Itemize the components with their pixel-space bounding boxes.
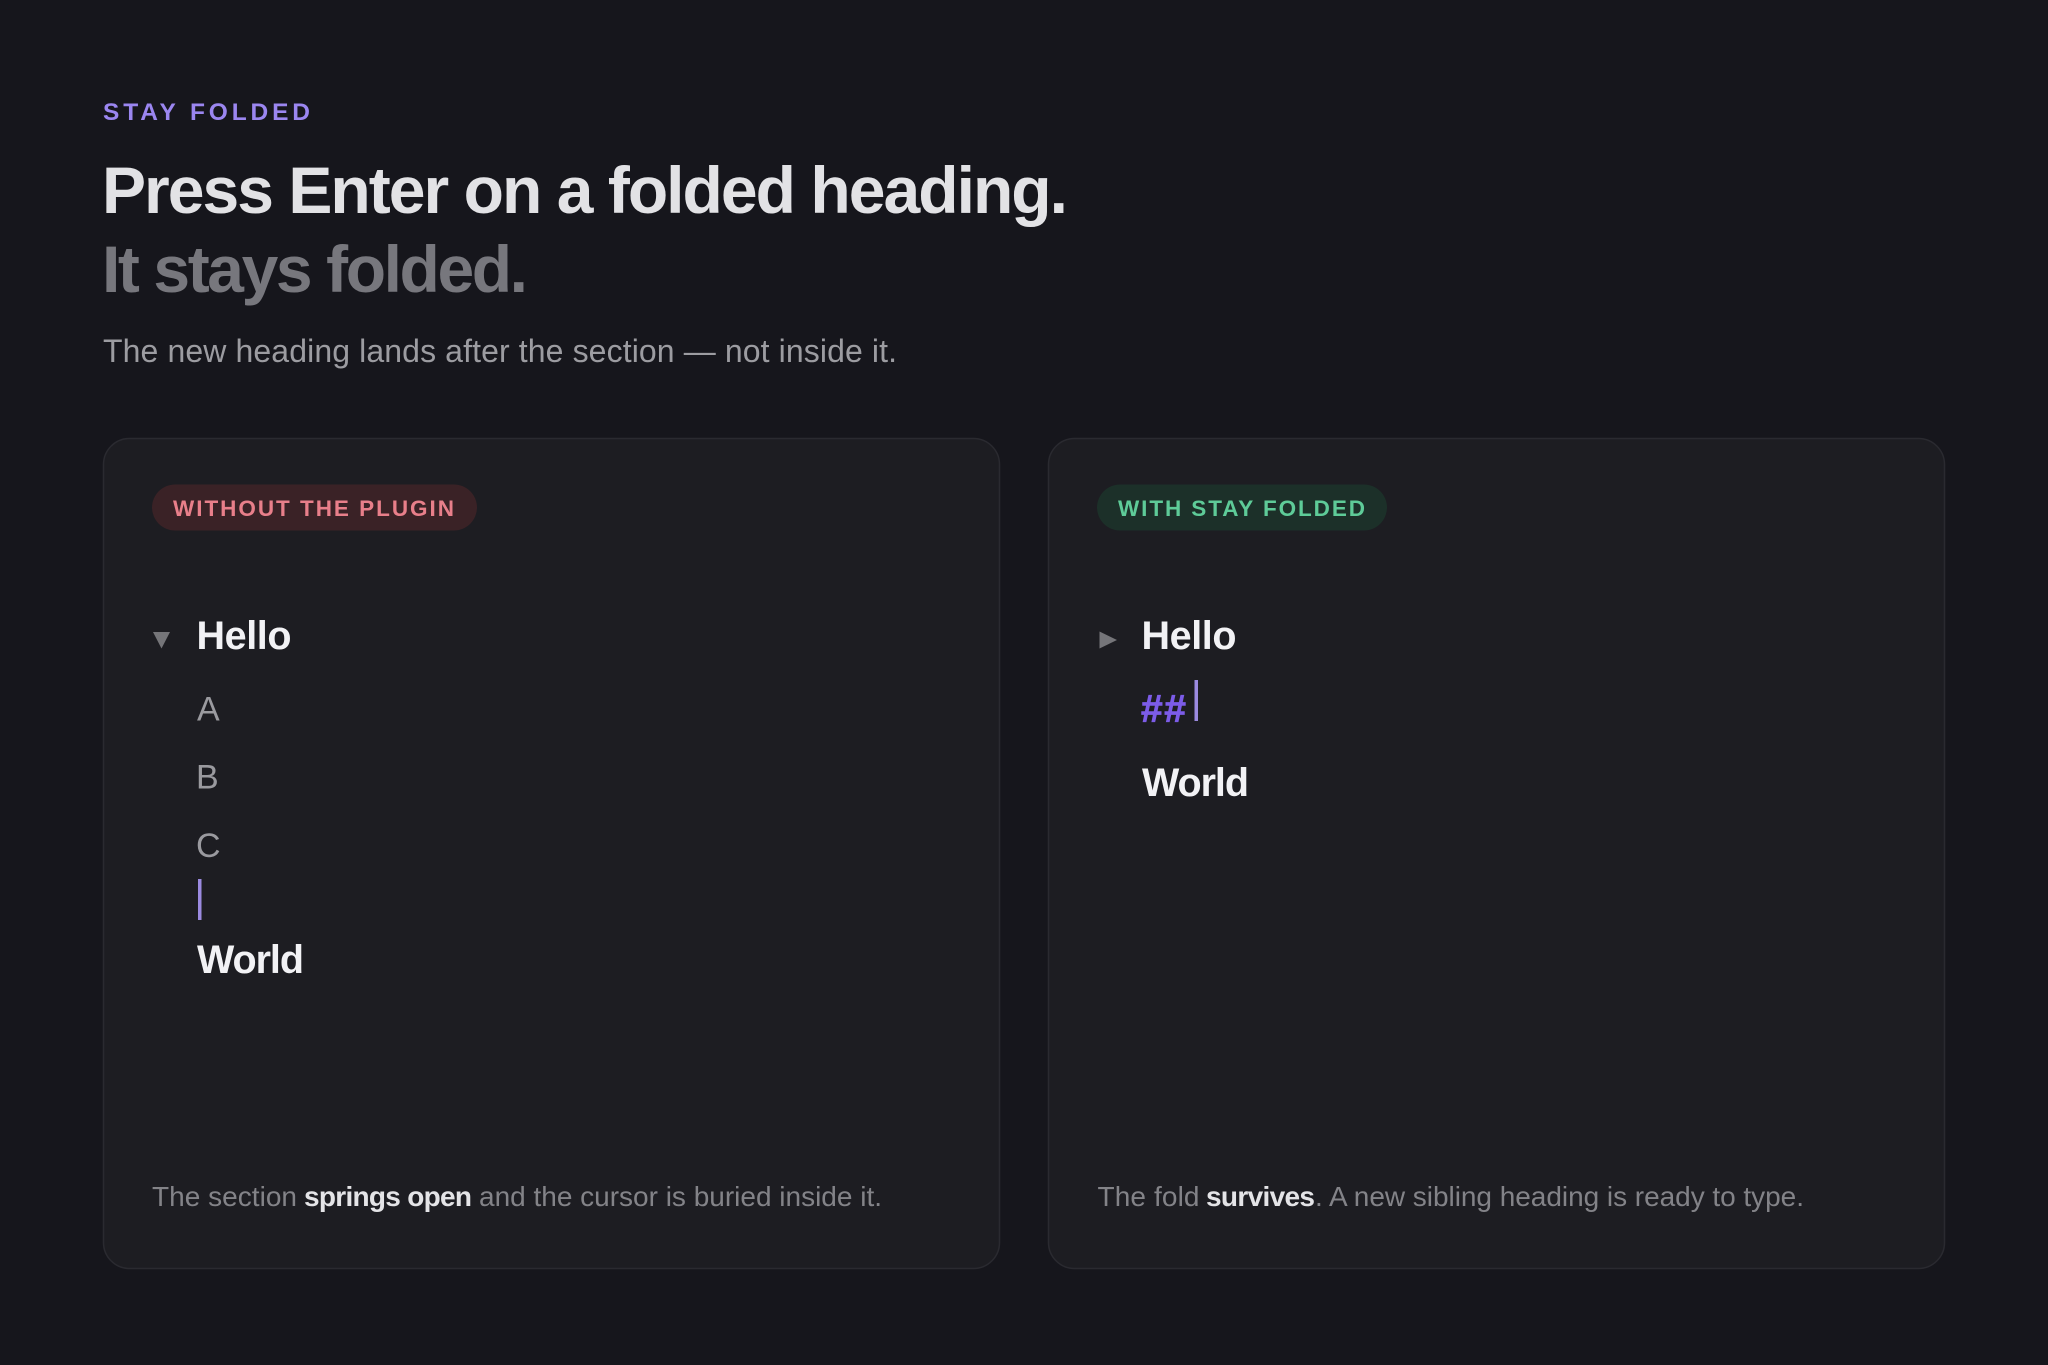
badge: without the plugin bbox=[152, 484, 477, 530]
caption: The fold bbox=[1098, 1181, 1200, 1212]
title line 1: Press Enter on a folded heading. bbox=[102, 153, 1068, 227]
heading Hello: Hello bbox=[1142, 614, 1236, 658]
badge: with stay folded: WITH STAY FOLDED bbox=[1118, 496, 1365, 521]
card background bbox=[1048, 438, 1944, 1268]
panel: without the plugin bbox=[104, 438, 1000, 1268]
title line 2: It stays folded. bbox=[102, 232, 528, 306]
card background bbox=[104, 438, 1000, 1268]
line C: C bbox=[196, 827, 221, 865]
line A: A bbox=[197, 690, 220, 728]
badge: without the plugin: WITHOUT THE PLUGIN bbox=[173, 496, 454, 521]
heading World: World bbox=[1142, 761, 1249, 805]
badge: with stay folded bbox=[1097, 484, 1387, 530]
header bbox=[102, 99, 1068, 369]
caption: The section bbox=[152, 1181, 297, 1212]
cursor bbox=[1194, 680, 1198, 721]
subtitle: The new heading lands after the section — not inside it. bbox=[103, 333, 897, 369]
cursor bbox=[198, 879, 202, 920]
caption bbox=[152, 1181, 882, 1212]
icon: expanded triangle bbox=[153, 632, 170, 648]
caption: springs open bbox=[304, 1181, 472, 1212]
heading World: World bbox=[197, 938, 304, 982]
caption bbox=[1098, 1181, 1804, 1212]
caption: survives bbox=[1206, 1181, 1315, 1212]
caption: and the cursor is buried inside it. bbox=[479, 1181, 882, 1212]
eyebrow: STAY FOLDED bbox=[103, 99, 310, 126]
panel: with stay folded bbox=[1048, 438, 1944, 1268]
line B: B bbox=[196, 758, 219, 796]
markdown hashes: ## bbox=[1141, 688, 1186, 731]
caption: . A new sibling heading is ready to type. bbox=[1315, 1181, 1804, 1212]
heading Hello: Hello bbox=[196, 614, 292, 658]
icon: collapsed triangle bbox=[1100, 632, 1117, 648]
